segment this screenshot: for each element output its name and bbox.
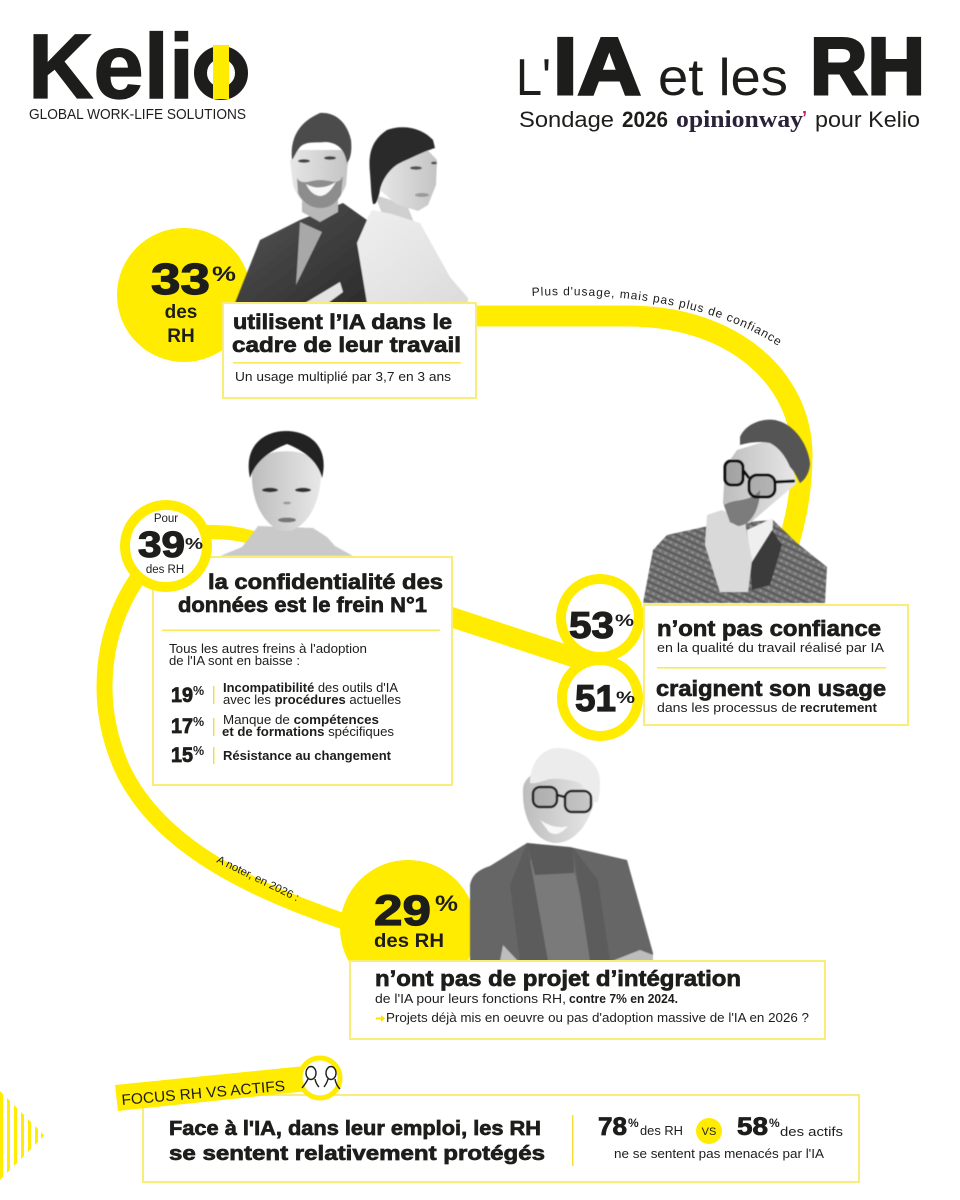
subtitle: sondage 2026 opinionway pour Kelio: Sondage (519, 107, 614, 132)
stat: 51%: % (616, 688, 635, 707)
list item: 15%: % (193, 744, 204, 758)
box: focus: Face à l'IA, dans leur emploi, les RH (169, 1118, 541, 1140)
rings: 53% and 51% (556, 574, 644, 741)
man: head (290, 113, 351, 222)
stat: 51%: 51 (575, 678, 616, 719)
text: autres freins: Tous les autres freins à l'adoption (169, 642, 367, 656)
stat: 58% des actifs: % (769, 1116, 780, 1130)
ring: 39% des RH: % (185, 536, 203, 553)
woman: head (523, 767, 596, 843)
photo: smiling senior woman (470, 748, 653, 961)
box: confiance et recrutement: en la qualité du travail réalisé par IA (657, 641, 885, 655)
list item: 17% (171, 713, 394, 739)
stat: 53%: 53 (569, 605, 614, 646)
list item: 17%: et de formations spécifiques (222, 725, 394, 739)
title: L'IA et les RH: IA (553, 22, 641, 112)
text: autres freins: de l'IA sont en baisse : (169, 654, 300, 668)
title: L'IA et les RH: et les (658, 49, 788, 107)
man: t-shirt (296, 222, 322, 285)
subtitle: sondage 2026 opinionway pour Kelio: 2026 (622, 107, 668, 132)
man: crossed arm hand (305, 282, 343, 303)
stat: 78% des RH: des RH (640, 1124, 683, 1138)
stat: 78% des RH (598, 1113, 683, 1141)
man: suit (643, 520, 827, 603)
box: utilisent l'IA (223, 303, 476, 398)
box: focus (143, 1095, 859, 1182)
box: utilisent l'IA: cadre de leur travail (232, 334, 461, 357)
ring: 39% des RH: 39 (138, 524, 185, 565)
subtitle: sondage 2026 opinionway pour Kelio: pour Kelio (815, 107, 920, 132)
woman: lapels (510, 843, 610, 961)
box: confiance et recrutement: dans les processus de (657, 701, 797, 715)
logo: Kelio: Keli (28, 16, 194, 118)
photo: man and woman back to back (235, 113, 468, 303)
title: L'IA et les RH (516, 22, 925, 112)
circle: 33% des RH: RH (167, 326, 195, 347)
heading: la confidentialité: données est le frein N°1 (178, 594, 427, 617)
list item: 17%: % (193, 715, 204, 729)
box: confidentialité (153, 557, 452, 785)
icon: two people in ring (300, 1058, 340, 1098)
box: pas de projet d'intégration (350, 961, 825, 1039)
list item: 19% (171, 681, 401, 707)
man: hand (705, 510, 752, 592)
list item: 15%: 15 (171, 744, 193, 767)
stat: 58% des actifs: 58 (737, 1113, 768, 1141)
heading: la confidentialité (178, 571, 443, 617)
woman: head (252, 451, 321, 531)
list item: 19%: 19 (171, 684, 193, 707)
box: utilisent l'IA: utilisent l’IA dans le (233, 311, 452, 334)
stat: 53% (569, 605, 634, 646)
woman: smile (540, 820, 568, 834)
box: pas de projet d'intégration: contre 7% en 2024. (569, 992, 678, 1006)
title: L'IA et les RH: L' (516, 49, 551, 107)
box: confiance et recrutement: recrutement (800, 701, 878, 715)
box: pas de projet d'intégration: n’ont pas de projet d’intégration (375, 966, 741, 991)
yellow path: short link from 39% ring to woman (200, 532, 265, 542)
woman: eyes and lips (262, 488, 311, 522)
circle: 33% des RH (117, 228, 251, 362)
stat: 58% des actifs (737, 1113, 843, 1141)
box: confiance et recrutement: craignent son usage (656, 676, 886, 701)
woman: jacket (470, 843, 653, 961)
yellow path: left arc to 29% circle (105, 572, 370, 930)
man: glasses (725, 461, 795, 497)
circle: 33% des RH: 33 (151, 255, 210, 304)
curved label: plus d'usage, mais pas plus de confiance: Plus d'usage, mais pas plus de confiance (532, 286, 780, 345)
ring: 39% des RH: Pour (154, 513, 178, 525)
woman: white hair (530, 748, 600, 803)
box: confiance et recrutement (644, 605, 908, 725)
box: focus: se sentent relativement protégés (169, 1143, 545, 1165)
focus tag (115, 1066, 308, 1111)
box: pas de projet d'intégration: Projets déjà mis en oeuvre ou pas d'adoption massive de l'IA en 2026 ? (386, 1011, 809, 1025)
stat: 29% des RH: des RH (374, 931, 444, 952)
subtitle: sondage 2026 opinionway pour Kelio: opinionway (676, 107, 803, 133)
heading: la confidentialité: la confidentialité des (208, 571, 443, 594)
woman: hair (370, 127, 435, 204)
stat: 29% des RH (374, 887, 458, 952)
man: head (723, 440, 797, 523)
list item: 15% (171, 744, 392, 767)
woman: white shirt (355, 210, 468, 303)
woman: crossed hands (500, 945, 653, 961)
man: hair (740, 420, 810, 483)
subtitle: sondage 2026 opinionway pour Kelio (519, 107, 920, 133)
focus tag: FOCUS RH VS ACTIFS (121, 1078, 286, 1109)
box: pas de projet d'intégration: de l'IA pour leurs fonctions RH, (375, 992, 566, 1006)
circle: 33% des RH: des (165, 302, 197, 323)
list item: 17%: 17 (171, 715, 193, 738)
ring: 39% des RH (125, 505, 207, 587)
text: autres freins (169, 642, 367, 668)
list item: 19%: avec les procédures actuelles (223, 693, 401, 707)
decoration: striped chevron (0, 1091, 44, 1180)
yellow path: diagonal link to 53% circle (445, 615, 585, 661)
woman: hair (249, 431, 324, 478)
list item: 17%: Manque de compétences (223, 713, 379, 727)
woman: glasses (533, 787, 591, 812)
logo: Kelio: GLOBAL WORK-LIFE SOLUTIONS (29, 107, 246, 123)
stat: 51% (575, 678, 635, 719)
subtitle: sondage 2026 opinionway pour Kelio: ’ (802, 108, 807, 128)
box: confiance et recrutement: n’ont pas confiance (657, 616, 881, 641)
title: L'IA et les RH: RH (810, 22, 925, 112)
woman: sweater (220, 526, 353, 556)
badge: vs: VS (702, 1126, 716, 1138)
woman: neck and face (375, 140, 437, 225)
stat: 29% des RH: 29 (374, 887, 431, 935)
ring: 39% des RH: des RH (146, 564, 184, 576)
man: beard (724, 490, 760, 526)
label: à noter en 2026: A noter, en 2026 : (215, 854, 301, 904)
list item: 19%: % (193, 684, 204, 698)
list item: 19%: Incompatibilité des outils d'IA (223, 681, 399, 695)
man: jacket (235, 203, 367, 303)
circle: 29% yellow background (340, 860, 476, 996)
woman: sweater (530, 860, 595, 961)
photo: thinking man with glasses (643, 420, 827, 603)
stat: 78% des RH: % (628, 1116, 639, 1130)
list item: 15%: Résistance au changement (223, 749, 392, 763)
circle: 33% des RH: % (212, 263, 236, 286)
stat: 29% des RH: % (435, 891, 458, 916)
stat: 53%: % (615, 611, 634, 630)
stat: 78% des RH: 78 (598, 1113, 627, 1141)
yellow path: top connector curve (470, 316, 802, 552)
badge: vs (696, 1118, 722, 1144)
text: ne se sentent pas menacés: ne se sentent pas menacés par l'IA (614, 1147, 825, 1161)
man: shirt and tie (747, 518, 773, 580)
stat: 58% des actifs: des actifs (780, 1125, 843, 1139)
photo: woman with hair tied (220, 431, 353, 556)
box: utilisent l'IA: Un usage multiplié par 3,7 en 3 ans (235, 370, 451, 384)
